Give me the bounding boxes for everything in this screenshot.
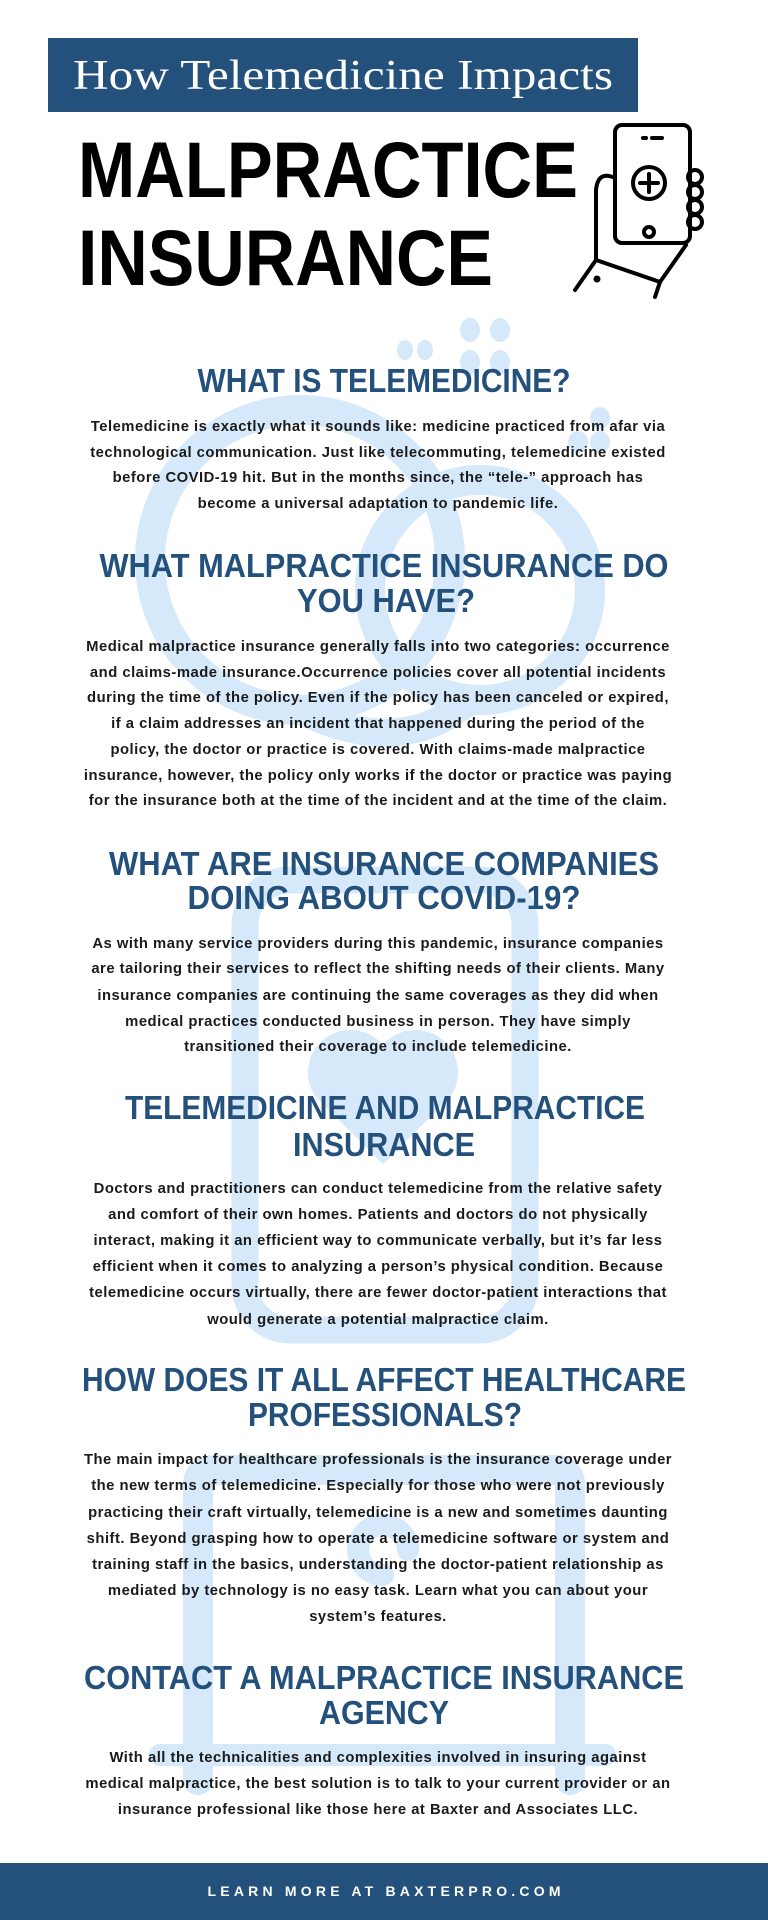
heading: insurance companies covid: WHAT ARE INSURANCE COMPANIES — [109, 845, 659, 882]
heading: telemedicine and malpractice: INSURANCE — [293, 1126, 475, 1163]
text: what is telemedicine: Telemedicine is exactly what it sounds like: medicine practiced from afar via — [91, 419, 665, 435]
footer bar — [0, 1863, 768, 1920]
text: malpractice insurance types: and claims-made insurance.Occurrence policies cover all potential incidents — [90, 665, 666, 681]
text: insurance companies covid: transitioned their coverage to include telemedicine. — [184, 1039, 572, 1055]
heading: affect healthcare professionals: PROFESSIONALS? — [248, 1396, 522, 1433]
heading: insurance companies covid — [109, 845, 659, 916]
text: telemedicine and malpractice: telemedicine occurs virtually, there are fewer doctor-patient interactions that — [89, 1285, 667, 1301]
text: telemedicine and malpractice: efficient when it comes to analyzing a person’s physical condition. Because — [93, 1259, 663, 1275]
heading: telemedicine and malpractice: TELEMEDICINE AND MALPRACTICE — [125, 1089, 645, 1126]
text: what is telemedicine — [90, 419, 666, 512]
text: affect healthcare professionals — [84, 1452, 672, 1625]
heading: affect healthcare professionals: HOW DOES IT ALL AFFECT HEALTHCARE — [82, 1361, 686, 1398]
text: insurance companies covid: insurance companies are continuing the same coverages as they did when — [97, 988, 659, 1004]
text: what is telemedicine: become a universal adaptation to pandemic life. — [198, 496, 558, 512]
text: what is telemedicine: technological communication. Just like telecommuting, telemedicine existed — [90, 445, 666, 461]
main title: MALPRACTICE — [78, 125, 578, 214]
text: contact agency: insurance professional like those here at Baxter and Associates LLC. — [118, 1802, 638, 1818]
text: affect healthcare professionals: mediated by technology is no easy task. Learn what you can about your — [108, 1583, 648, 1599]
heading: insurance companies covid: DOING ABOUT COVID-19? — [188, 879, 580, 916]
text: telemedicine and malpractice: and comfort of their own homes. Patients and doctors do not physically — [108, 1207, 648, 1223]
heading: malpractice insurance you have: YOU HAVE? — [297, 582, 475, 619]
text: malpractice insurance types: Medical malpractice insurance generally falls into two categories: occurrence — [86, 639, 670, 655]
text: malpractice insurance types: insurance, however, the policy only works if the doctor or practice was paying — [84, 768, 672, 784]
footer bar: LEARN MORE AT BAXTERPRO.COM — [208, 1883, 560, 1899]
heading: contact agency — [84, 1659, 684, 1731]
heading: malpractice insurance you have: WHAT MALPRACTICE INSURANCE DO — [100, 547, 668, 584]
main title: INSURANCE — [78, 213, 493, 302]
text: telemedicine and malpractice: interact, making it an efficient way to communicate verbally, but it’s far less — [93, 1233, 663, 1249]
text: insurance companies covid: are tailoring their services to reflect the shifting needs of their clients. Many — [91, 961, 665, 977]
text: insurance companies covid: medical practices conducted business in person. They have simply — [125, 1014, 631, 1030]
text: malpractice insurance types: during the time of the policy. Even if the policy has been canceled or expired, — [87, 690, 669, 706]
text: malpractice insurance types: if a claim addresses an incident that happened during the period of the — [111, 716, 645, 732]
text: contact agency: medical malpractice, the best solution is to talk to your current provider or an — [85, 1776, 671, 1792]
text: affect healthcare professionals: system’s features. — [309, 1609, 447, 1625]
text: malpractice insurance types: for the insurance both at the time of the incident and at the time of the claim. — [89, 793, 667, 809]
text: telemedicine and malpractice: Doctors and practitioners can conduct telemedicine from the relative safety — [94, 1181, 663, 1197]
text: affect healthcare professionals: the new terms of telemedicine. Especially for those who were not previously — [91, 1478, 665, 1494]
watermark background — [150, 318, 610, 1780]
text: affect healthcare professionals: The main impact for healthcare professionals is the insurance coverage under — [84, 1452, 672, 1468]
heading: contact agency: AGENCY — [319, 1694, 449, 1731]
text: insurance companies covid: As with many service providers during this pandemic, insurance companies — [92, 936, 664, 952]
heading: what is telemedicine: WHAT IS TELEMEDICINE? — [198, 362, 570, 399]
text: telemedicine and malpractice: would generate a potential malpractice claim. — [206, 1312, 549, 1328]
text: insurance companies covid — [91, 936, 665, 1055]
heading: malpractice insurance you have — [100, 547, 668, 619]
header banner: How Telemedicine Impacts — [73, 53, 613, 99]
text: affect healthcare professionals: shift. Beyond grasping how to operate a telemedicine software or system and — [87, 1531, 669, 1547]
heading: affect healthcare professionals — [82, 1361, 686, 1433]
text: what is telemedicine: before COVID-19 hit. But in the months since, the “tele-” approach has — [113, 470, 643, 486]
heading: contact agency: CONTACT A MALPRACTICE INSURANCE — [84, 1659, 684, 1696]
text: contact agency — [85, 1750, 671, 1818]
header banner — [48, 38, 638, 112]
text: malpractice insurance types — [84, 639, 672, 809]
text: telemedicine and malpractice — [89, 1181, 667, 1328]
text: malpractice insurance types: policy, the doctor or practice is covered. With claims-made malpractice — [110, 742, 646, 758]
text: affect healthcare professionals: practicing their craft virtually, telemedicine is a new and sometimes daunting — [88, 1505, 668, 1521]
icon: hand holding phone — [575, 125, 702, 297]
text: contact agency: With all the technicalities and complexities involved in insuring against — [109, 1750, 647, 1766]
main title — [78, 125, 578, 302]
text: affect healthcare professionals: training staff in the basics, understanding the doctor-patient relationship as — [92, 1557, 664, 1573]
heading: telemedicine and malpractice — [125, 1089, 645, 1163]
